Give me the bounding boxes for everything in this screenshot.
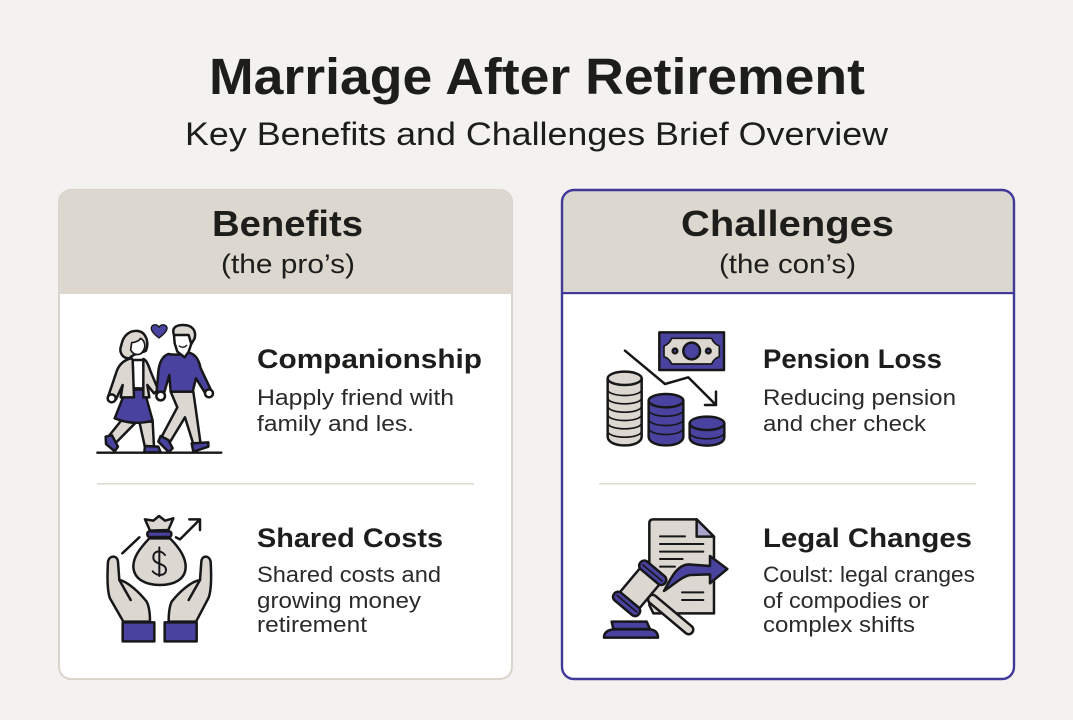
item: shared costs text: Shared Costs [257,523,443,553]
icon: gavel and document [604,519,727,652]
item: companionship text: Happly friend with [257,385,454,410]
item: legal changes text: of compodies or [763,588,929,613]
item: shared costs text: Shared costs and [257,562,441,587]
item: companionship text: family and les. [257,411,414,436]
item: legal changes text: Coulst: legal cranges [763,562,975,587]
item: pension loss text [763,344,956,436]
panel: challenges [562,190,1014,679]
panel: benefits [59,190,512,679]
icon: money bag in hands [107,516,211,641]
item: pension loss text: Reducing pension [763,385,956,410]
item: shared costs text: retirement [257,612,367,637]
subtitle: Key Benefits and Challenges Brief Overview [185,116,889,152]
item: legal changes text: Legal Changes [763,523,972,553]
item: pension loss text: Pension Loss [763,344,942,374]
item: companionship text [257,344,482,436]
icon: pension loss [608,332,724,446]
challenges header [562,190,1014,293]
icon: couple walking [97,325,221,453]
item: companionship text: Companionship [257,344,482,374]
challenges header: Challenges [681,203,894,244]
benefits header: (the pro’s) [221,249,355,279]
item: shared costs text: growing money [257,588,421,613]
benefits header: Benefits [212,203,363,244]
challenges header: (the con’s) [719,249,856,279]
item: legal changes text [763,523,975,637]
item: legal changes text: complex shifts [763,612,915,637]
benefits header [59,190,512,294]
title: Marriage After Retirement [209,48,865,105]
item: shared costs text [257,523,443,637]
item: pension loss text: and cher check [763,411,927,436]
